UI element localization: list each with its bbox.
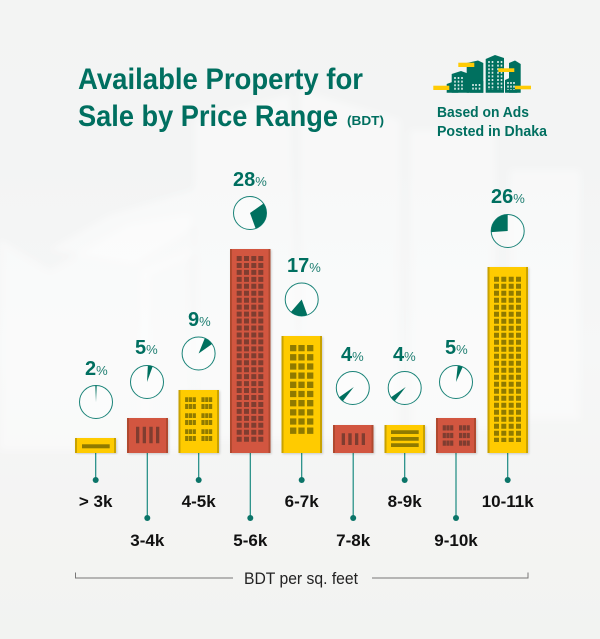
title: (BDT) xyxy=(347,114,384,128)
column: 8-9k, 4%: 4% xyxy=(393,344,416,366)
column: 8-9k, 4%: 8-9k xyxy=(388,492,422,511)
title: Sale by Price Range xyxy=(78,100,338,133)
column: 7-8k, 4%: 7-8k xyxy=(336,531,371,550)
column: 5-6k, 28%: 28% xyxy=(233,169,267,191)
axis: BDT per sq. feet: BDT per sq. feet xyxy=(244,569,358,588)
column: 10-11k, 26%: 26% xyxy=(491,186,525,208)
column: 10-11k, 26%: 10-11k xyxy=(482,492,534,511)
column: 10-11k, 26% xyxy=(482,186,534,511)
column: 9-10k, 5% xyxy=(434,337,478,550)
title: Available Property for xyxy=(78,63,363,96)
column: 4-5k, 9%: 4-5k xyxy=(182,492,216,511)
column: 9-10k, 5%: 9-10k xyxy=(434,531,478,550)
column: 3-4k, 5% xyxy=(127,337,168,550)
logo caption xyxy=(437,105,548,140)
logo caption: Posted in Dhaka xyxy=(437,124,548,140)
column: > 3k, 2% xyxy=(75,358,116,511)
logo caption: Based on Ads xyxy=(437,105,529,121)
column: 4-5k, 9% xyxy=(178,309,219,511)
column: 3-4k, 5%: 3-4k xyxy=(130,531,165,550)
icon: city skyline logo xyxy=(433,55,531,93)
column: 4-5k, 9%: 9% xyxy=(188,309,211,331)
column: 6-7k, 17%: 6-7k xyxy=(285,492,319,511)
column: 6-7k, 17% xyxy=(282,255,322,511)
axis: BDT per sq. feet xyxy=(76,569,528,588)
column: 9-10k, 5%: 5% xyxy=(445,337,468,359)
column: 5-6k, 28%: 5-6k xyxy=(233,531,268,550)
column: 5-6k, 28% xyxy=(230,169,270,550)
column: > 3k, 2%: > 3k xyxy=(79,492,113,511)
column: 8-9k, 4% xyxy=(384,344,425,511)
title xyxy=(78,63,384,133)
column: 7-8k, 4%: 4% xyxy=(341,344,364,366)
column: 6-7k, 17%: 17% xyxy=(287,255,321,277)
column: 3-4k, 5%: 5% xyxy=(135,337,158,359)
column: 7-8k, 4% xyxy=(333,344,374,550)
column: > 3k, 2%: 2% xyxy=(85,358,108,380)
